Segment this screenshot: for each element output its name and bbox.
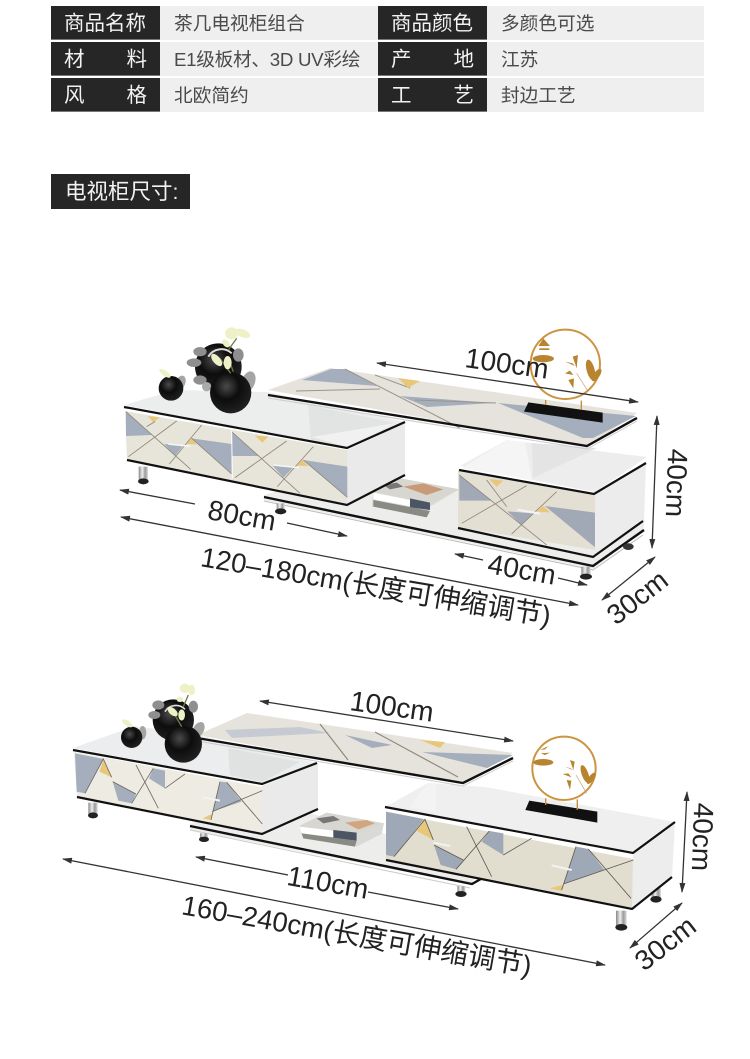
value: material [160, 42, 378, 76]
dimension: 110cm [196, 857, 458, 909]
value: product name: 茶几电视柜组合 [174, 13, 305, 34]
dimension: 40cm height: 40cm [686, 802, 719, 872]
dimension: 40cm height [652, 416, 693, 548]
dimension: 40cm drawer [455, 548, 587, 591]
label: material: 材 [64, 48, 84, 71]
right drawer pattern 2 [386, 812, 633, 898]
value: style [160, 78, 378, 112]
dimension: 40cm drawer: 40cm [486, 548, 558, 591]
left drawer pattern 1 [126, 412, 347, 497]
dimension: 80cm [120, 490, 347, 537]
value: origin [487, 42, 704, 76]
dimension: 100cm [260, 685, 513, 741]
dimension: 160-240cm [63, 859, 605, 982]
value: product name [160, 6, 378, 40]
dimension: 120-180cm: 120–180cm(长度可伸缩调节) [199, 541, 553, 632]
dimension: 80cm: 80cm [206, 494, 278, 537]
label: craft: 艺 [454, 84, 474, 107]
dimension: 100cm [377, 342, 638, 402]
label: origin: 产 [391, 48, 412, 71]
label: colour [378, 6, 487, 40]
cabinet set 1: 120-180cm [120, 327, 693, 632]
label: material [51, 42, 160, 76]
label: craft: 工 [391, 84, 412, 107]
label: product name [51, 6, 160, 40]
label: craft [378, 78, 487, 112]
dimension: 120-180cm [121, 517, 578, 632]
label: style: 风 [64, 84, 84, 107]
ring ornament 1 [524, 330, 603, 423]
ring ornament 2 [525, 737, 597, 823]
value: colour [487, 6, 704, 40]
value: colour: 多颜色可选 [501, 13, 594, 34]
label: style: 格 [126, 84, 147, 107]
right drawer cabinet 1 [458, 440, 647, 557]
glass top shelf 1 [268, 368, 637, 449]
label: origin: 地 [454, 48, 474, 71]
dimension: 40cm height [682, 792, 719, 892]
value: craft [487, 78, 704, 112]
books 2 [299, 813, 384, 847]
vases 1 [158, 327, 258, 413]
left drawer pattern 2 [75, 753, 262, 824]
legs 2 [88, 803, 209, 842]
heading: TV cabinet size [51, 174, 190, 209]
heading: TV cabinet size: 电视柜尺寸: [65, 180, 178, 204]
left drawer cabinet 2 [73, 726, 318, 835]
shelf base 2 [190, 800, 486, 888]
dimension: 40cm height: 40cm [660, 448, 693, 518]
shelf base 1 [264, 470, 645, 570]
label: product name: 商品名称 [64, 12, 146, 35]
glass top shelf 2 [197, 713, 513, 786]
label: origin [378, 42, 487, 76]
right drawer cabinet 2 [385, 783, 675, 909]
dimension: 30cm depth: 30cm [629, 910, 702, 977]
left drawer cabinet 1 [124, 390, 405, 505]
dimension: 100cm: 100cm [463, 342, 551, 385]
right drawer pattern 1 [459, 475, 595, 547]
value: style: 北欧简约 [174, 85, 249, 106]
value: origin: 江苏 [501, 49, 538, 70]
cabinet set 2: 160-240cm [63, 684, 719, 982]
vases 2 [121, 684, 207, 763]
books 1 [372, 478, 459, 517]
label: material: 料 [126, 48, 147, 71]
dimension: 160-240cm: 160–240cm(长度可伸缩调节) [180, 889, 534, 982]
dimension: 30cm depth: 30cm [601, 564, 674, 631]
dimension: 110cm: 110cm [285, 860, 371, 905]
value: craft: 封边工艺 [501, 85, 576, 106]
label: colour: 商品颜色 [391, 12, 473, 35]
dimension: 100cm: 100cm [348, 685, 436, 728]
spec table [51, 6, 704, 112]
value: material: E1级板材、3D UV彩绘 [174, 49, 360, 70]
legs 1 [138, 467, 286, 514]
label: style [51, 78, 160, 112]
